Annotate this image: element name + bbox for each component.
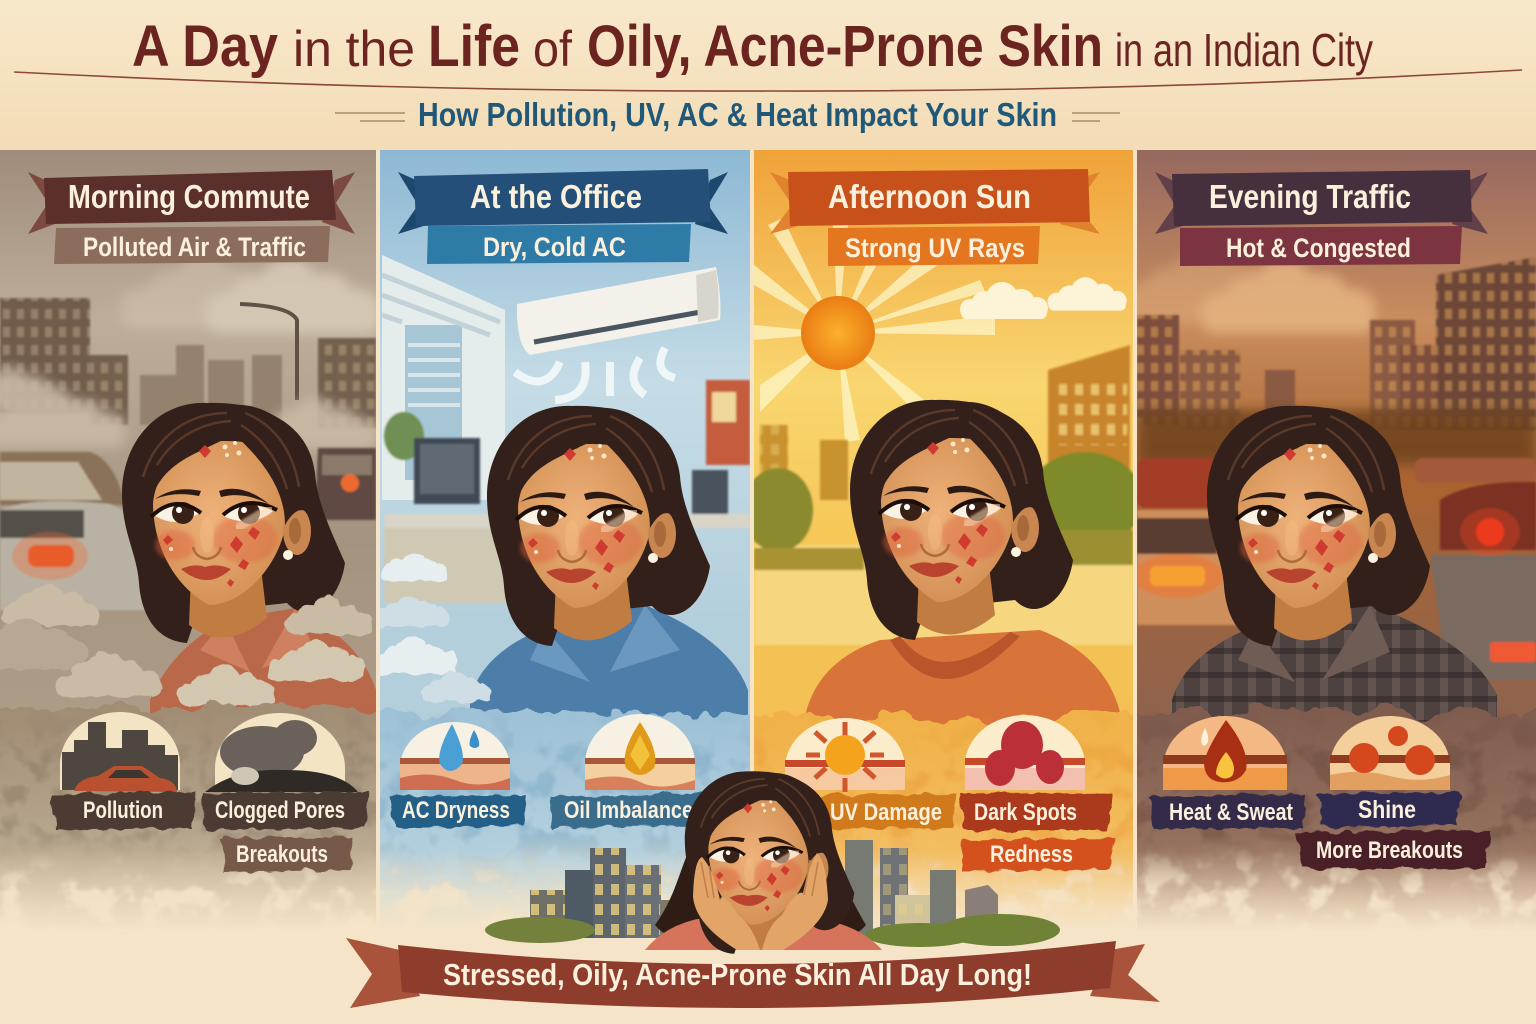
- title: of: [533, 21, 572, 77]
- title underline: [14, 70, 1522, 91]
- label: dark spots: [960, 792, 1112, 830]
- office desk and monitor: [384, 380, 750, 603]
- street lamp: [240, 304, 297, 400]
- mottled stains: [756, 738, 1133, 873]
- lower panel wash: [380, 706, 750, 908]
- title: in an Indian City: [1115, 24, 1373, 76]
- icon: sun: [801, 296, 875, 370]
- icon: breakouts: [1330, 716, 1450, 790]
- banner: at the office: At the Office: [470, 178, 642, 215]
- label: uv damage: [815, 794, 956, 829]
- icon: dark spots: [965, 715, 1085, 790]
- woman: head: [850, 400, 1073, 640]
- label: shine: [1318, 792, 1460, 827]
- banner: evening traffic: Evening Traffic: [1209, 178, 1411, 215]
- icon: air conditioner: [515, 267, 720, 400]
- panel: evening traffic: [1137, 150, 1536, 923]
- banner: morning commute: Polluted Air & Traffic: [83, 232, 306, 262]
- banner: afternoon sun: Afternoon Sun: [828, 178, 1031, 215]
- woman: head: [122, 403, 345, 643]
- bottom banner: [346, 938, 1160, 1008]
- title: [132, 14, 1373, 79]
- smoke clouds left and right: [0, 585, 373, 705]
- label: breakouts: Breakouts: [236, 841, 328, 868]
- label: redness: Redness: [990, 841, 1073, 868]
- bottom skyline: [485, 840, 1060, 947]
- label: more breakouts: [1297, 830, 1490, 869]
- label: breakouts: [222, 837, 354, 872]
- woman: shirt: [806, 630, 1120, 730]
- icon: flame: [1163, 716, 1287, 790]
- banner: afternoon sun: [770, 169, 1100, 266]
- woman: shirt: [150, 608, 376, 714]
- window with blinds: [382, 255, 505, 500]
- dust cloud: [1137, 258, 1380, 338]
- title: Oily, Acne-Prone Skin: [587, 14, 1103, 79]
- banner: morning commute: Morning Commute: [68, 178, 310, 215]
- woman: stressed with hands on cheeks: [645, 771, 882, 954]
- label: clogged pores: [202, 792, 368, 830]
- header band: [0, 0, 1536, 150]
- woman: head: [1207, 406, 1430, 646]
- label: oil imbalance: [548, 794, 702, 828]
- banner: at the office: [398, 169, 728, 264]
- icon: pollution: [60, 712, 180, 792]
- lower panel wash: [754, 710, 1133, 920]
- banner: afternoon sun: Strong UV Rays: [845, 233, 1025, 263]
- banner: evening traffic: Hot & Congested: [1226, 233, 1411, 263]
- dusk skyline: [1137, 257, 1536, 430]
- cold mist clouds: [370, 553, 490, 701]
- label: dark spots: Dark Spots: [974, 799, 1077, 826]
- hazy clouds behind skyline: [120, 254, 381, 333]
- label: shine: Shine: [1358, 796, 1416, 824]
- label: pollution: [52, 792, 195, 830]
- title: in the: [293, 21, 415, 77]
- label: heat and sweat: [1150, 794, 1305, 829]
- banner: at the office: Dry, Cold AC: [483, 232, 626, 262]
- traffic cars: [0, 448, 376, 610]
- woman: shirt: [470, 605, 748, 730]
- mottled lower fade: [0, 835, 1536, 935]
- icon: uv sun: [785, 718, 905, 792]
- bottom fade: [0, 850, 1536, 932]
- lower panel wash: [0, 700, 376, 898]
- traffic cars: [1133, 458, 1536, 680]
- sunny buildings and trees: [743, 345, 1143, 645]
- banner: morning commute: [28, 170, 355, 264]
- label: more breakouts: More Breakouts: [1316, 837, 1463, 864]
- sun rays: [754, 218, 995, 442]
- lower panel wash: [1100, 710, 1536, 950]
- mottled stains: [380, 727, 750, 877]
- title: Life: [428, 14, 520, 79]
- label: oil imbalance: Oil Imbalance: [564, 797, 693, 824]
- mottled stains: [1137, 700, 1536, 890]
- mottled stains: [0, 742, 376, 873]
- smog band: [0, 367, 378, 450]
- bottom banner: Stressed, Oily, Acne-Prone Skin All Day Long!: [443, 957, 1032, 992]
- label: ac dryness: [390, 794, 526, 828]
- icon: oil drop: [585, 714, 695, 790]
- label: pollution: Pollution: [83, 797, 163, 824]
- title: A Day: [132, 14, 278, 79]
- city skyline: [0, 298, 376, 428]
- subtitle: How Pollution, UV, AC & Heat Impact Your Skin: [418, 96, 1057, 133]
- woman: head: [487, 406, 710, 646]
- label: redness: [960, 838, 1115, 871]
- icon: clogged pores: [205, 713, 358, 792]
- woman: shirt: [1172, 605, 1497, 730]
- label: ac dryness: AC Dryness: [402, 797, 510, 824]
- tree line: [1137, 410, 1536, 465]
- panel: morning commute: [0, 150, 376, 916]
- panel: at the office: [380, 150, 750, 916]
- panel: afternoon sun: [754, 150, 1133, 920]
- banner: evening traffic: [1155, 170, 1488, 266]
- label: clogged pores: Clogged Pores: [215, 797, 345, 824]
- label: heat and sweat: Heat & Sweat: [1169, 799, 1293, 826]
- label: uv damage: UV Damage: [830, 799, 942, 826]
- icon: water drop: [400, 722, 510, 790]
- drifting clouds: [960, 277, 1127, 319]
